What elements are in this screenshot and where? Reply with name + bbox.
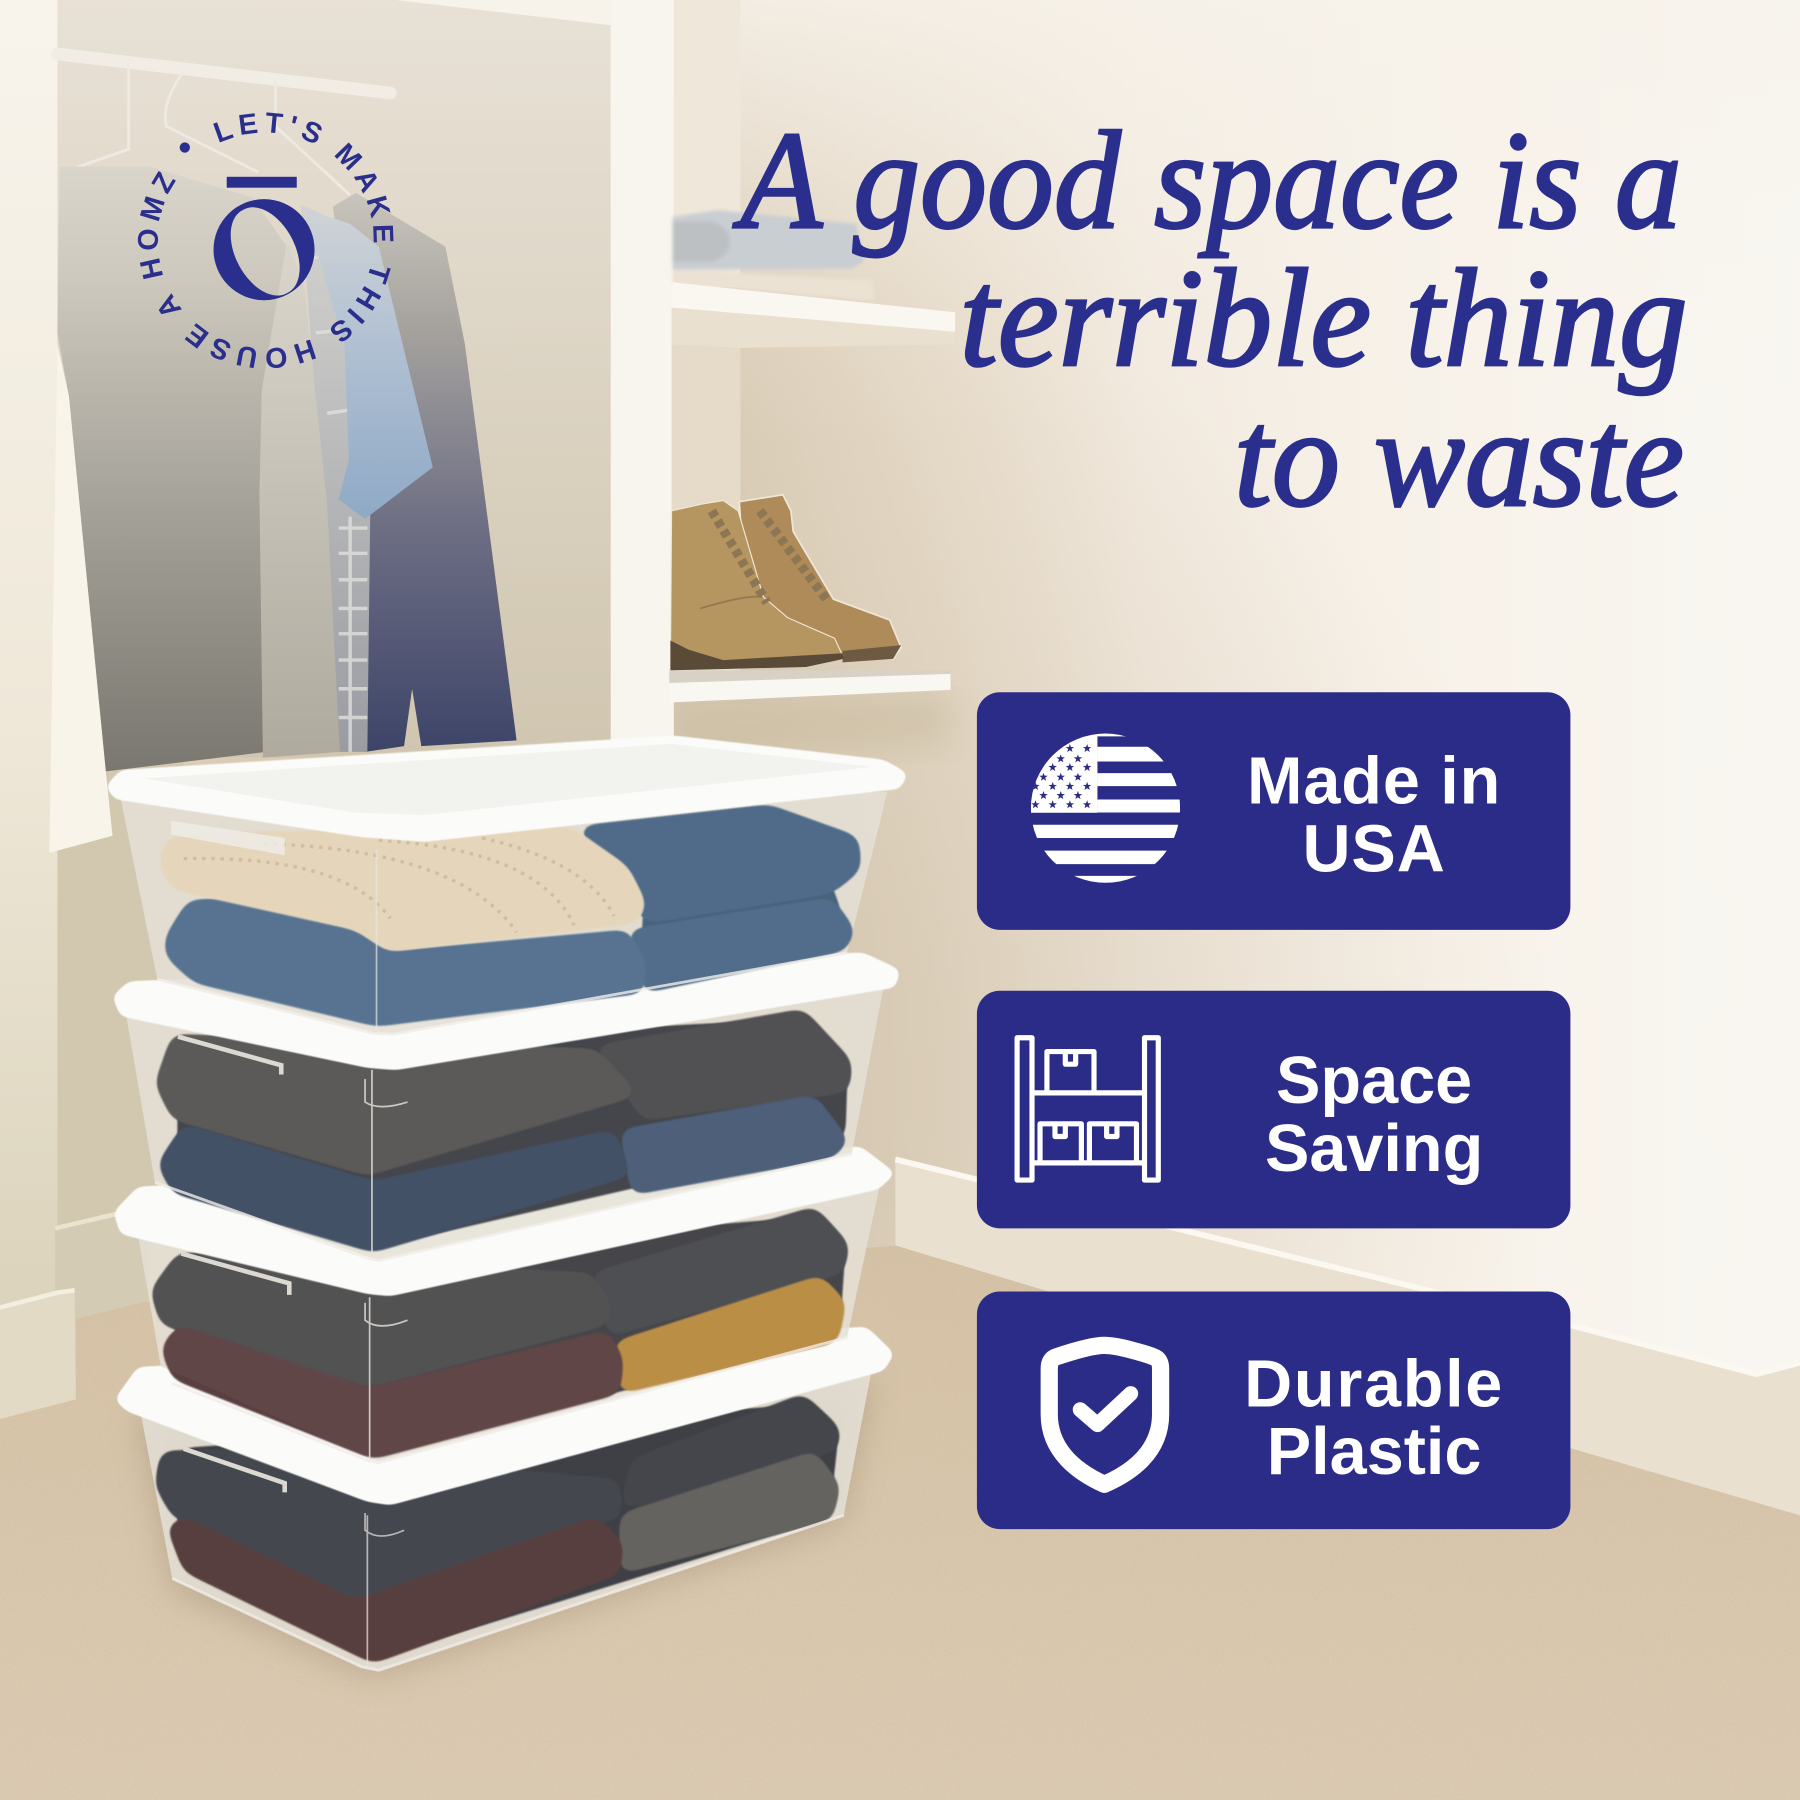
- closet interior: [57, 0, 611, 758]
- stack of storage boxes: [106, 736, 908, 1670]
- folded clothes in box 3: [150, 1207, 849, 1459]
- baseboard: right wall: [895, 1157, 1800, 1515]
- lid 1: [106, 736, 908, 841]
- lid 4: [115, 1327, 894, 1505]
- lid 3: [114, 1147, 895, 1296]
- logo letter o: [214, 199, 315, 300]
- closet baseboards: [55, 1205, 149, 1319]
- folded clothes in box 1: [161, 805, 861, 1026]
- hanging clothes: [49, 54, 517, 853]
- folded clothes in box 2: [155, 1009, 852, 1252]
- ring text: LET'S MAKE THIS HOUSE A HOMZ: [138, 112, 394, 368]
- logo: circular badge: [138, 112, 394, 368]
- headline: [733, 103, 1688, 536]
- knit blanket: [161, 827, 646, 952]
- shadow below bottom shelf: [669, 692, 951, 758]
- label: space saving: Space: [1276, 1044, 1472, 1118]
- white shirt: [49, 344, 112, 853]
- label: made in USA: USA: [1302, 812, 1446, 886]
- box 1 top: [106, 736, 908, 1034]
- icon: US flag globe: [1031, 734, 1180, 884]
- plaid shirt: [301, 204, 373, 752]
- boots: [670, 495, 901, 670]
- label: made in USA: Made in: [1247, 745, 1501, 819]
- logo macron: [227, 177, 297, 188]
- boot: front: [670, 501, 844, 670]
- icon: shelving rack with boxes: [1017, 1038, 1158, 1180]
- label: durable plastic: Durable: [1244, 1347, 1504, 1421]
- grey t-shirt: [57, 166, 287, 771]
- shelf bays: [674, 0, 740, 287]
- box 4 bottom: [115, 1327, 894, 1670]
- box 2: [112, 953, 900, 1260]
- panel: made in USA: [977, 692, 1570, 930]
- carpet floor: [0, 1246, 1800, 1800]
- headline: to waste: [1234, 381, 1684, 536]
- bottom shelf: [669, 673, 951, 703]
- label: space saving: Saving: [1265, 1112, 1483, 1186]
- floor shadow under boxes: [138, 1378, 872, 1678]
- closet structure: [0, 0, 955, 1419]
- logo ring path and text: [158, 133, 374, 348]
- folded clothes in box 4: [155, 1394, 840, 1663]
- headline: terrible thing: [960, 241, 1687, 396]
- folded towels on upper shelf: [673, 210, 875, 301]
- blue t-shirt: [304, 209, 433, 519]
- headline: A good space is a: [733, 103, 1682, 258]
- panel: space saving: [977, 991, 1570, 1228]
- lid 2: [112, 953, 900, 1070]
- clothes rail: [57, 54, 390, 93]
- hangers: [63, 63, 350, 195]
- top shelf: [673, 282, 955, 332]
- box 3: [114, 1147, 895, 1462]
- beige cardigan: [259, 241, 340, 758]
- ring dot: [180, 142, 190, 153]
- centre divider: [611, 0, 674, 746]
- left pillar: [0, 0, 57, 1309]
- icon: shield with check: [1049, 1345, 1161, 1484]
- panel: durable plastic: [977, 1291, 1570, 1529]
- navy long sleeve: [333, 193, 517, 752]
- boot: rear: [739, 495, 901, 662]
- label: durable plastic: Plastic: [1267, 1415, 1481, 1489]
